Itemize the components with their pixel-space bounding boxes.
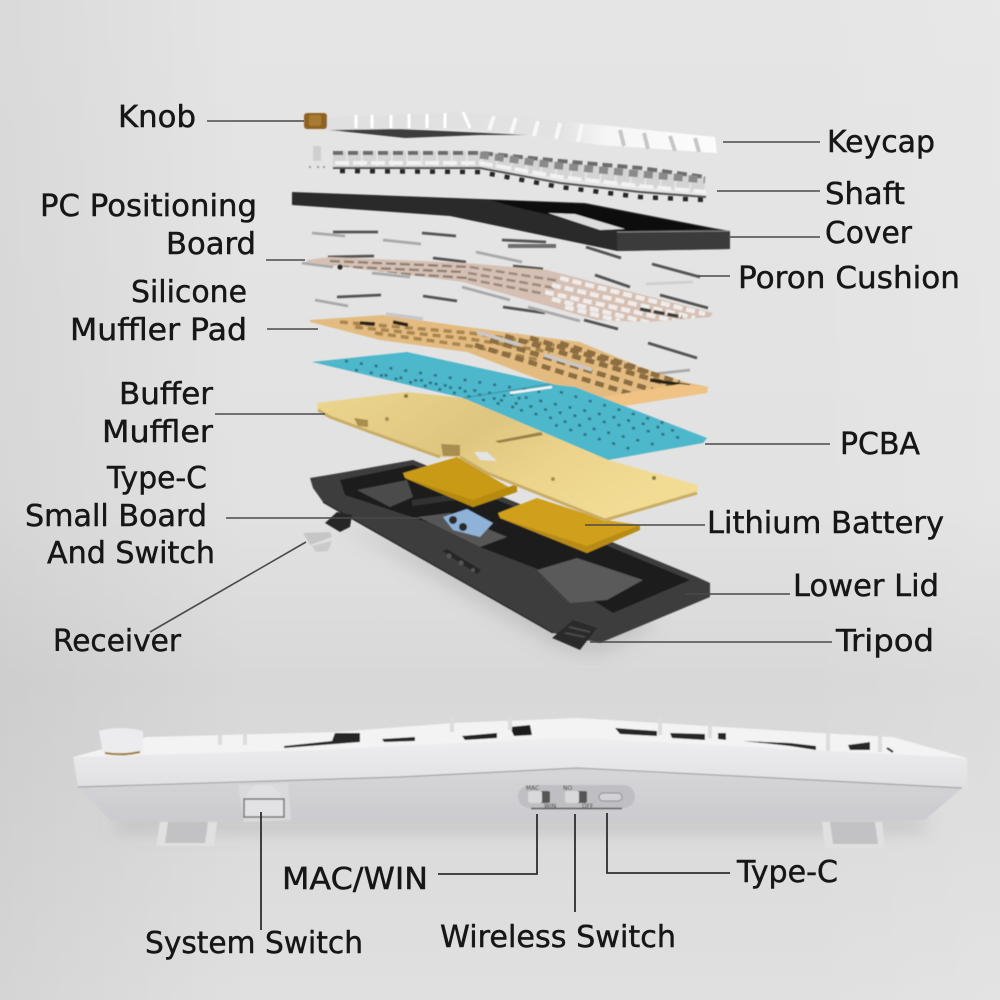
label: Type-C Small Board And Switch: Type-C	[106, 461, 207, 496]
label: Silicone Muffler Pad: Silicone	[131, 275, 247, 310]
switch panel	[518, 785, 635, 810]
label: Buffer Muffler: Buffer	[119, 377, 214, 412]
label: MAC/WIN: MAC/WIN	[282, 862, 428, 897]
lower lid	[310, 460, 710, 643]
label: PC Positioning Board: Board	[166, 227, 256, 262]
label: Receiver: Receiver	[53, 624, 182, 659]
label: System Switch: System Switch	[145, 926, 363, 961]
keycap layer	[327, 112, 717, 153]
type-c small board	[443, 509, 493, 537]
switch panel: NO	[563, 785, 572, 792]
label: Poron Cushion: Poron Cushion	[738, 261, 960, 296]
label: PC Positioning Board: PC Positioning	[40, 189, 257, 224]
receiver	[303, 532, 332, 552]
label: Keycap: Keycap	[827, 125, 935, 160]
label: PC Positioning Board	[40, 189, 257, 262]
switch panel: MAC	[526, 785, 539, 792]
shadow under lid	[330, 520, 660, 655]
upper band	[73, 738, 968, 788]
label: Type-C rear: Type-C	[736, 855, 838, 890]
label: Buffer Muffler	[102, 377, 214, 450]
label: Shaft: Shaft	[825, 177, 905, 212]
leader lines: rear view	[261, 812, 730, 930]
label: Knob: Knob	[118, 100, 196, 135]
label: Type-C Small Board And Switch: Small Board	[25, 499, 207, 534]
feet	[156, 822, 885, 848]
assembled keyboard rear view	[73, 714, 968, 848]
leader lines: exploded view	[150, 121, 832, 642]
desk shadow	[115, 820, 925, 830]
switch panel: OFF	[582, 803, 594, 810]
left foot	[325, 512, 352, 532]
cover frame	[292, 192, 730, 251]
poron cushion strips	[302, 232, 708, 375]
label: Type-C Small Board And Switch	[25, 461, 215, 571]
top deck	[73, 714, 967, 758]
system switch	[238, 783, 291, 822]
label: Lower Lid: Lower Lid	[793, 569, 939, 604]
label: Lithium Battery: Lithium Battery	[707, 506, 944, 541]
knob	[304, 113, 327, 129]
buffer muffler	[317, 392, 698, 520]
exploded keyboard diagram	[292, 112, 730, 655]
knob	[99, 728, 143, 754]
label: Buffer Muffler: Muffler	[102, 415, 214, 450]
tripod foot	[552, 620, 597, 650]
lithium batteries	[403, 457, 640, 553]
label: Silicone Muffler Pad: Muffler Pad	[70, 313, 247, 348]
label: PCBA: PCBA	[840, 427, 920, 462]
label: Type-C Small Board And Switch: And Switch	[47, 536, 215, 571]
silicone muffler pad	[310, 314, 708, 407]
lower band	[78, 768, 962, 822]
shaft layer	[309, 146, 706, 200]
label: Wireless Switch: Wireless Switch	[440, 920, 676, 955]
PC positioning board	[307, 257, 713, 323]
PCBA board	[312, 352, 707, 460]
switch panel: WIN	[544, 803, 556, 810]
label: Tripod: Tripod	[835, 624, 934, 659]
label: Cover: Cover	[825, 216, 913, 251]
label: Silicone Muffler Pad	[70, 275, 247, 348]
